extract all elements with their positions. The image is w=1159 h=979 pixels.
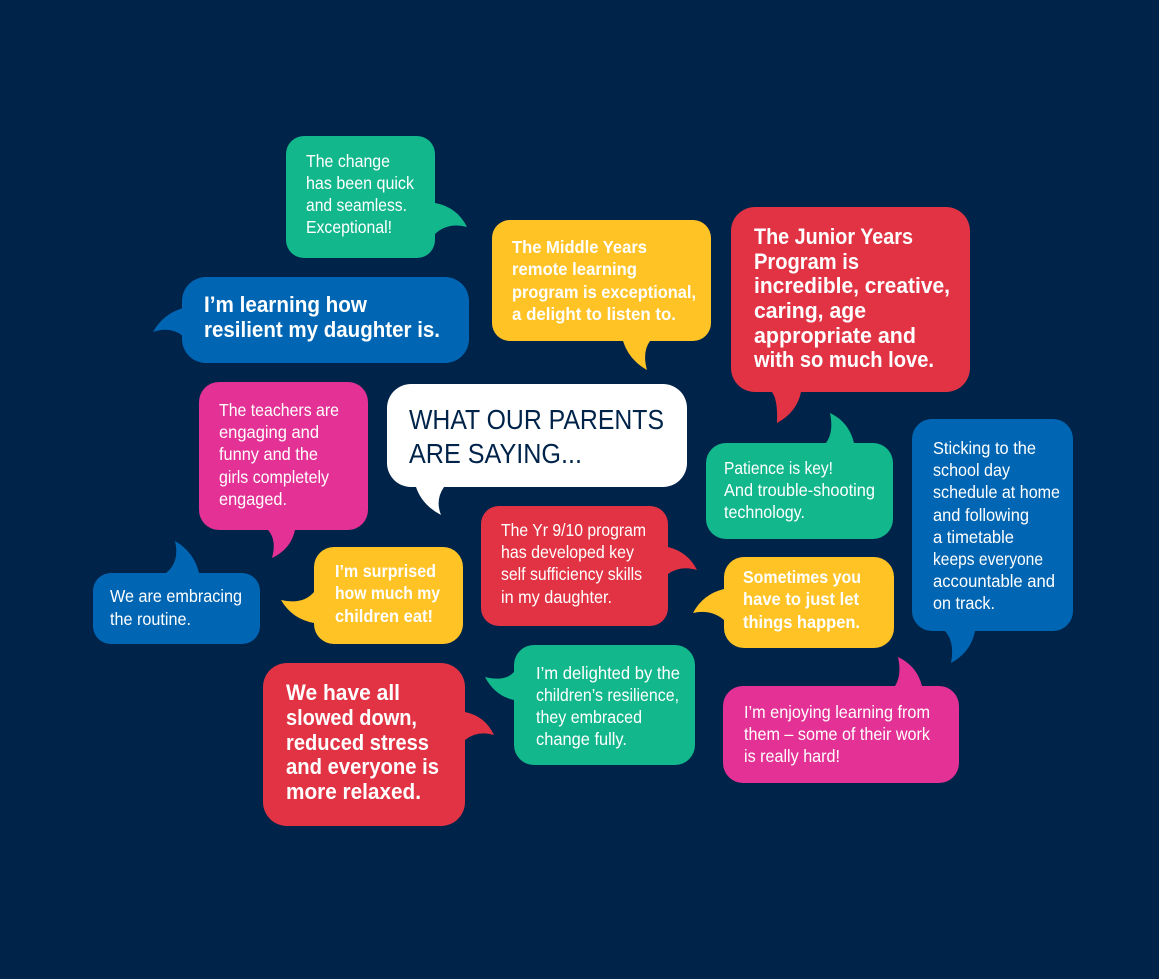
quote text: I’m delighted by the	[536, 663, 680, 683]
quote text	[536, 663, 680, 749]
quote text	[743, 567, 861, 632]
quote text: schedule at home	[933, 482, 1060, 502]
quote text: girls completely	[219, 467, 329, 487]
quote text	[501, 520, 646, 607]
speech bubble: the change	[286, 136, 467, 258]
bubble shape	[93, 541, 260, 644]
quote text: engaging and	[219, 422, 319, 442]
quote text: The teachers are	[219, 400, 339, 420]
quote text: and everyone is	[286, 754, 439, 779]
speech bubble: enjoying learning	[723, 657, 959, 783]
quote text: resilient my daughter is.	[204, 317, 440, 342]
quote text: children eat!	[335, 606, 433, 626]
quote text	[744, 702, 930, 766]
quote text: Sticking to the	[933, 438, 1036, 458]
speech bubble: patience	[706, 413, 893, 539]
quote text: I’m enjoying learning from	[744, 702, 930, 722]
quote text: I’m surprised	[335, 561, 436, 581]
title bubble	[387, 384, 687, 515]
speech bubble: year 9/10 program	[481, 506, 697, 626]
quote text: has been quick	[306, 173, 414, 193]
quote text: in my daughter.	[501, 587, 612, 607]
quote text: they embraced	[536, 707, 642, 727]
quote text: with so much love.	[753, 347, 934, 372]
bubble shape	[492, 220, 711, 370]
quote text: remote learning	[512, 259, 637, 279]
quote text	[286, 680, 439, 804]
bubble shape	[153, 277, 469, 363]
quote text: the routine.	[110, 609, 191, 629]
quote text: The Yr 9/10 program	[501, 520, 646, 540]
quote text: slowed down,	[286, 705, 417, 730]
quote text	[335, 561, 440, 626]
quote text: And trouble-shooting	[724, 480, 875, 500]
speech bubble: slowed down	[263, 663, 494, 826]
quote text	[724, 458, 875, 522]
quote text: The Junior Years	[754, 224, 913, 249]
bubble shape	[485, 645, 695, 765]
quote text: more relaxed.	[286, 779, 421, 804]
quote text: We have all	[286, 680, 400, 705]
quote text: engaged.	[219, 489, 287, 509]
quote text: program is exceptional,	[512, 282, 696, 302]
quote text: The Middle Years	[512, 237, 647, 257]
bubble shape	[199, 382, 368, 558]
speech bubble: sticking to schedule	[912, 419, 1073, 663]
quote text: reduced stress	[286, 730, 429, 755]
quote text: how much my	[335, 583, 440, 603]
speech bubble: delighted by resilience	[485, 645, 695, 765]
quote text	[306, 151, 414, 237]
bubble shape	[723, 657, 959, 783]
quote text	[933, 438, 1060, 613]
quote text: We are embracing	[110, 586, 242, 606]
quote text: incredible, creative,	[754, 273, 950, 298]
quote text: has developed key	[501, 542, 634, 562]
bubble shape	[706, 413, 893, 539]
speech bubble: let things happen	[693, 557, 894, 648]
quote text: self sufficiency skills	[501, 564, 642, 584]
quote text: caring, age	[754, 298, 866, 323]
quote text: is really hard!	[744, 746, 840, 766]
quote text: keeps everyone	[933, 549, 1043, 569]
quote text: change fully.	[536, 729, 627, 749]
bubble shape	[912, 419, 1073, 663]
title text	[409, 404, 664, 469]
quote text: technology.	[724, 502, 805, 522]
speech bubble: junior years	[731, 207, 970, 423]
quote text: The change	[306, 151, 390, 171]
quote text: Exceptional!	[306, 217, 392, 237]
quote text: I’m learning how	[204, 292, 367, 317]
quote text	[110, 586, 242, 629]
quote text: school day	[933, 460, 1010, 480]
bubble shape	[731, 207, 970, 423]
speech bubble: resilient daughter	[153, 277, 469, 363]
speech bubble: teachers	[199, 382, 368, 558]
quote text: have to just let	[743, 589, 859, 609]
speech bubble: middle years	[492, 220, 711, 370]
quote text: a timetable	[933, 527, 1014, 547]
bubble shape	[481, 506, 697, 626]
quote text: a delight to listen to.	[512, 304, 676, 324]
quote text: and following	[933, 505, 1029, 525]
quote text: and seamless.	[306, 195, 407, 215]
bubble shape	[263, 663, 494, 826]
quote text: Patience is key!	[724, 458, 833, 478]
quote text: things happen.	[743, 612, 860, 632]
quote text: accountable and	[933, 571, 1055, 591]
quote text: Program is	[754, 249, 859, 274]
quote text	[219, 400, 339, 509]
quote text	[753, 224, 950, 372]
quote text: appropriate and	[754, 323, 916, 348]
bubble shape	[286, 136, 467, 258]
title text: WHAT OUR PARENTS	[409, 404, 664, 435]
quote text: them – some of their work	[744, 724, 930, 744]
quote text: Sometimes you	[743, 567, 861, 587]
quote text	[204, 292, 440, 342]
title text: ARE SAYING...	[409, 438, 582, 469]
quote text: on track.	[933, 593, 995, 613]
quote text	[512, 237, 696, 324]
speech bubble: children eat	[281, 547, 463, 644]
speech bubble: embracing the routine	[93, 541, 260, 644]
bubble shape	[693, 557, 894, 648]
quote text: children’s resilience,	[536, 685, 679, 705]
quote text: funny and the	[219, 444, 318, 464]
bubble shape	[387, 384, 687, 515]
bubble shape	[281, 547, 463, 644]
